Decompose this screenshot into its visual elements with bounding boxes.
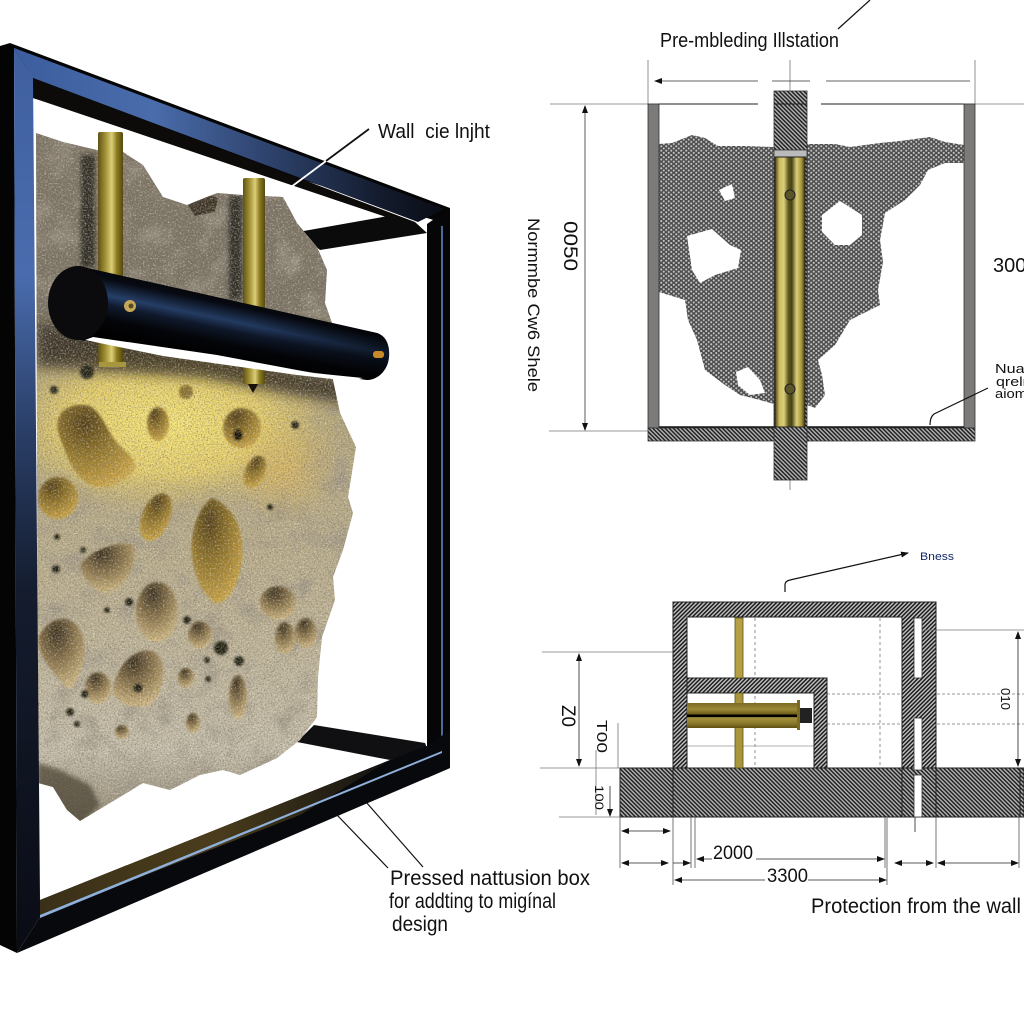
callout: pressed extrusion box <box>337 802 590 936</box>
rock holes <box>38 365 317 739</box>
rock panel <box>30 125 370 825</box>
vertical note: Normmbe Cw6 Shele <box>524 218 543 392</box>
dimension lines <box>549 60 1024 490</box>
dimension lines <box>540 630 1024 885</box>
dimension 2000: 2000 <box>713 843 753 864</box>
callout: pressed extrusion box: design <box>392 913 448 936</box>
note callout: Nuat <box>995 361 1024 376</box>
frame left post <box>0 43 40 953</box>
brass rod and tube <box>687 618 812 768</box>
dimension 3300: 3300 <box>767 866 808 887</box>
wall slots <box>914 618 922 817</box>
diagram: section view <box>540 551 1024 918</box>
diagram: pre-embedding illustration <box>524 0 1024 490</box>
dimension 100: 100 <box>592 785 606 810</box>
hatched housing <box>620 602 1024 817</box>
callout: wall light: Wall cie lnjht <box>378 121 490 143</box>
right post <box>243 178 265 393</box>
shadow under lamp <box>36 155 370 404</box>
brass posts <box>98 132 265 393</box>
callout: pressed extrusion box: for addting to migínal <box>389 890 556 913</box>
side walls and base <box>648 104 975 441</box>
caption: protection from the wall: Protection from the wall <box>811 895 1021 918</box>
back frame bars <box>297 216 427 760</box>
dimension T00: T00 <box>593 720 610 753</box>
frame top bar <box>10 43 450 233</box>
callout: wall light <box>283 121 490 193</box>
mesh rock section <box>659 135 964 408</box>
note callout: qrelr <box>996 374 1024 389</box>
top line and center post <box>659 91 964 480</box>
note callout <box>930 361 1024 425</box>
dimension 010: 010 <box>998 688 1013 710</box>
left post <box>98 132 126 367</box>
note callout: aiom <box>995 386 1024 401</box>
diagram title: Pre-mbleding Illstation <box>660 30 839 52</box>
diagram title <box>660 0 870 52</box>
lamp bolts <box>124 300 384 358</box>
frame bottom bar <box>17 730 450 953</box>
dimension Z0: Z0 <box>557 705 578 727</box>
section leader with Bness label: Bness <box>920 551 955 563</box>
section leader with Bness label <box>785 551 955 592</box>
brass tube <box>775 157 805 427</box>
callout: pressed extrusion box: Pressed nattusion box <box>390 867 590 890</box>
dimension 0050: 0050 <box>559 221 580 271</box>
wall lamp <box>48 266 389 381</box>
front frame <box>0 43 450 953</box>
frame right post <box>427 208 450 778</box>
dashed guides <box>687 618 1024 768</box>
